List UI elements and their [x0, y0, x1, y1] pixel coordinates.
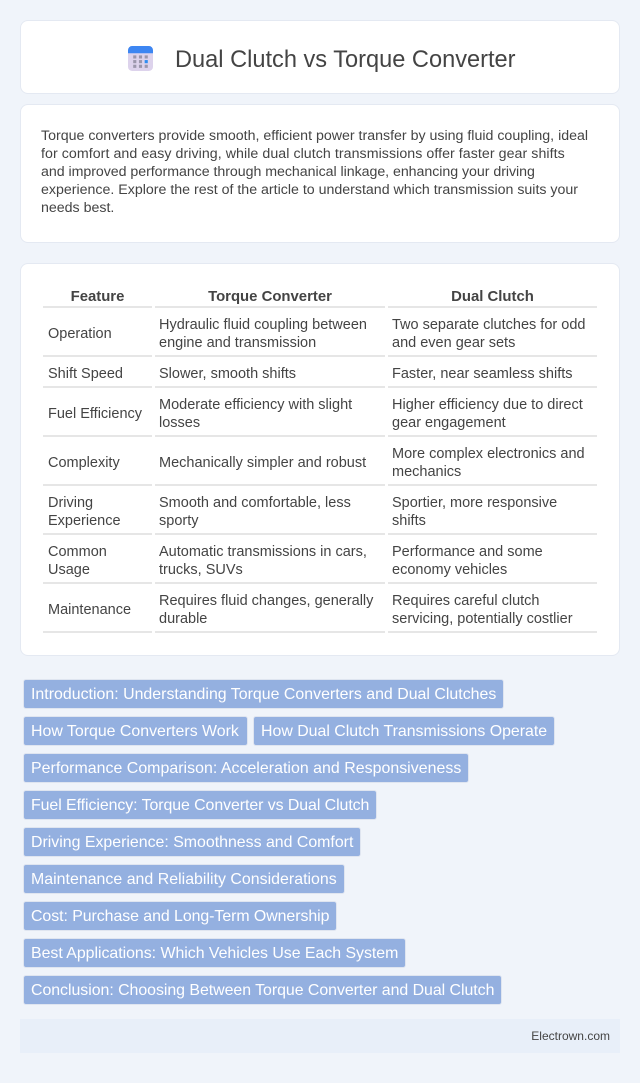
row: maintenance: Requires fluid changes, generally	[159, 593, 373, 609]
row: common usage: economy vehicles	[392, 562, 507, 578]
row: complexity: Complexity	[48, 455, 120, 471]
intro text panel: needs best.	[41, 200, 114, 216]
row: maintenance: Maintenance	[48, 602, 131, 618]
row: driving experience: Experience	[48, 513, 121, 529]
row: driving experience: Smooth and comfortable, less	[159, 495, 351, 511]
row: fuel efficiency: Higher efficiency due to direct	[392, 397, 583, 413]
row: operation: engine and transmission	[159, 335, 316, 351]
footer	[20, 1019, 620, 1053]
table header row: Torque Converter	[208, 289, 332, 305]
topic chips: Performance Comparison: Acceleration and Responsiveness	[31, 760, 461, 777]
row: fuel efficiency	[48, 397, 583, 431]
row: shift speed: Faster, near seamless shifts	[392, 366, 573, 382]
topic chips: Introduction: Understanding Torque Converters and Dual Clutches	[31, 686, 496, 703]
intro text panel: Torque converters provide smooth, efficient power transfer by using fluid coupling, ideal	[41, 128, 588, 144]
row: fuel efficiency: Moderate efficiency with slight	[159, 397, 352, 413]
row: operation	[48, 317, 585, 351]
row: common usage	[48, 544, 543, 578]
row: maintenance: durable	[159, 611, 207, 627]
row: driving experience: Sportier, more responsive	[392, 495, 557, 511]
intro text panel: experience. Explore the rest of the article to understand which transmission suits your	[41, 182, 578, 198]
row: driving experience	[48, 495, 557, 529]
row: complexity: Mechanically simpler and robust	[159, 455, 366, 471]
topic chips: Cost: Purchase and Long-Term Ownership	[31, 908, 329, 925]
row: common usage: Usage	[48, 562, 90, 578]
intro text panel: for comfort and easy driving, while dual clutch transmissions offer faster gear shifts	[41, 146, 565, 162]
row: shift speed	[48, 366, 573, 382]
row: maintenance: servicing, potentially costlier	[392, 611, 573, 627]
topic chips: Driving Experience: Smoothness and Comfort	[31, 834, 353, 851]
row: shift speed: Shift Speed	[48, 366, 123, 382]
table header row	[71, 289, 534, 305]
row: common usage: trucks, SUVs	[159, 562, 243, 578]
row: operation: Hydraulic fluid coupling between	[159, 317, 367, 333]
title: Dual Clutch vs Torque Converter	[175, 47, 516, 73]
row: common usage: Common	[48, 544, 107, 560]
row: complexity	[48, 446, 585, 480]
topic chips	[23, 679, 555, 1005]
row: common usage: Automatic transmissions in cars,	[159, 544, 367, 560]
row: driving experience: shifts	[392, 513, 426, 529]
header card	[20, 20, 620, 94]
topic chips: Conclusion: Choosing Between Torque Converter and Dual Clutch	[31, 982, 494, 999]
row: driving experience: sporty	[159, 513, 198, 529]
row: driving experience: Driving	[48, 495, 93, 511]
row: fuel efficiency: losses	[159, 415, 200, 431]
topic chips: How Dual Clutch Transmissions Operate	[261, 723, 547, 740]
topic chips: Fuel Efficiency: Torque Converter vs Dual Clutch	[31, 797, 369, 814]
table header row: Feature	[71, 289, 124, 305]
intro text panel	[20, 104, 620, 243]
topic chips: How Torque Converters Work	[31, 723, 239, 740]
row: maintenance: Requires careful clutch	[392, 593, 540, 609]
row: fuel efficiency: Fuel Efficiency	[48, 406, 142, 422]
footer brand: Electrown.com	[531, 1029, 610, 1043]
row: operation: Operation	[48, 326, 112, 342]
panel: comparison table	[20, 263, 620, 656]
row: complexity: mechanics	[392, 464, 461, 480]
row: complexity: More complex electronics and	[392, 446, 585, 462]
row: common usage: Performance and some	[392, 544, 543, 560]
row: fuel efficiency: gear engagement	[392, 415, 506, 431]
row: operation: Two separate clutches for odd	[392, 317, 585, 333]
row: shift speed: Slower, smooth shifts	[159, 366, 296, 382]
row: maintenance	[48, 593, 573, 627]
intro text panel: and improved performance through mechanical linkage, enhancing your driving	[41, 164, 535, 180]
icon: calendar	[128, 46, 153, 71]
topic chips: Maintenance and Reliability Considerations	[31, 871, 337, 888]
topic chips: Best Applications: Which Vehicles Use Each System	[31, 945, 398, 962]
table header row: Dual Clutch	[451, 289, 534, 305]
row: operation: and even gear sets	[392, 335, 515, 351]
